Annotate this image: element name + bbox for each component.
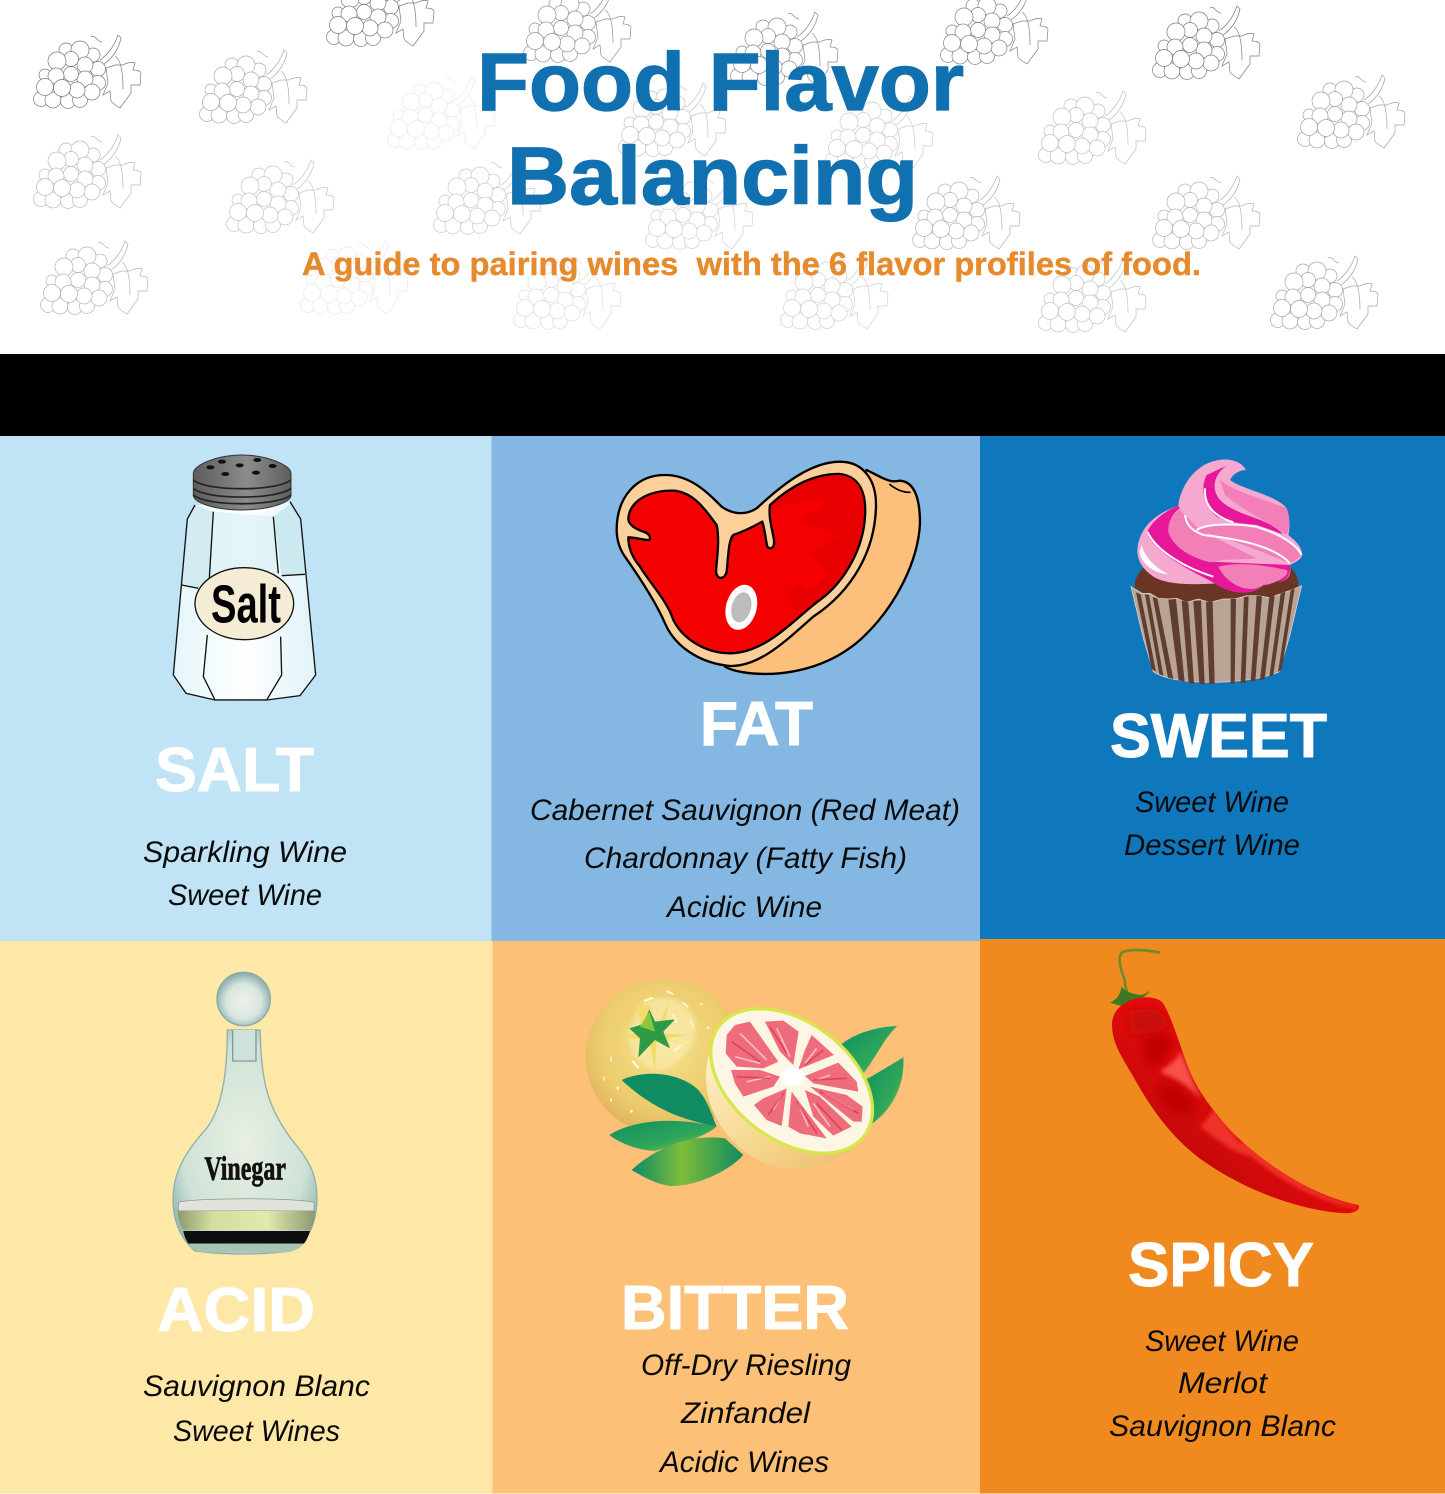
icon: steak <box>617 462 920 674</box>
wine list: spicy: Merlot <box>1178 1367 1269 1400</box>
wine list: bitter: Off-Dry Riesling <box>641 1349 851 1382</box>
panel: salt <box>0 436 492 941</box>
wine list: spicy: Sauvignon Blanc <box>1109 1410 1336 1443</box>
subtitle: A guide to pairing wines with the 6 flavor profiles of food. <box>302 246 1201 282</box>
wine list: sweet: Sweet Wine <box>1135 786 1289 819</box>
wine list: acid: Sauvignon Blanc <box>143 1370 370 1403</box>
panel: bitter <box>492 941 980 1494</box>
wine list: acid <box>143 1370 370 1448</box>
icon: salt shaker <box>173 455 316 700</box>
title: Balancing <box>507 131 918 222</box>
grape pattern <box>34 0 1405 332</box>
wine list: spicy: Sweet Wine <box>1145 1325 1299 1358</box>
heading: acid: ACID <box>157 1276 315 1345</box>
wine list: spicy <box>1109 1325 1336 1443</box>
wine list: fat: Chardonnay (Fatty Fish) <box>584 842 907 875</box>
icon: vinegar bottle <box>173 972 317 1254</box>
wine list: fat: Acidic Wine <box>665 891 822 924</box>
title: Food Flavor <box>477 37 964 128</box>
heading: spicy: SPICY <box>1128 1231 1314 1300</box>
title <box>477 37 964 222</box>
wine list: salt: Sparkling Wine <box>143 836 347 869</box>
panel: spicy <box>980 939 1445 1494</box>
wine list: sweet: Dessert Wine <box>1124 829 1300 862</box>
heading: salt: SALT <box>155 736 314 805</box>
wine list: fat: Cabernet Sauvignon (Red Meat) <box>530 794 960 827</box>
panel: sweet <box>980 436 1445 939</box>
icon: vinegar bottle: Vinegar <box>204 1150 286 1187</box>
wine list: salt: Sweet Wine <box>168 879 322 912</box>
icon: grapefruit <box>586 977 903 1186</box>
panel: acid <box>0 941 492 1494</box>
header background <box>0 0 1445 354</box>
heading: sweet: SWEET <box>1110 702 1327 771</box>
icon: chili pepper <box>1110 950 1359 1213</box>
heading: bitter: BITTER <box>621 1274 849 1343</box>
wine list: bitter: Acidic Wines <box>658 1446 829 1479</box>
wine list: sweet <box>1124 786 1300 862</box>
wine list: bitter: Zinfandel <box>680 1397 811 1430</box>
icon: cupcake <box>1131 460 1302 684</box>
wine list: bitter <box>641 1349 851 1479</box>
black band <box>0 354 1445 436</box>
icon: salt shaker: Salt <box>211 576 281 635</box>
panel: fat <box>492 436 980 941</box>
heading: fat: FAT <box>700 690 813 759</box>
wine list: acid: Sweet Wines <box>173 1415 340 1448</box>
wine list: salt <box>143 836 347 912</box>
wine list: fat <box>530 794 960 924</box>
